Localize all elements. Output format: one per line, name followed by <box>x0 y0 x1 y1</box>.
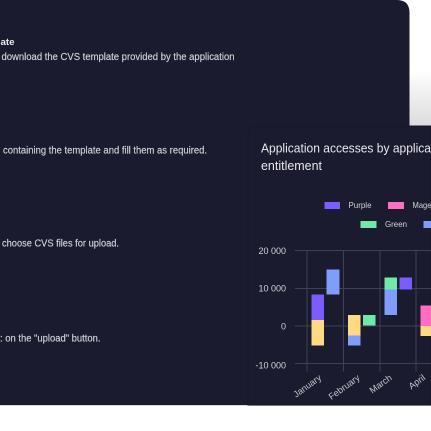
x axis labels: February <box>327 372 362 402</box>
step 3 text: choose CVS files for upload. <box>2 238 119 250</box>
panel: chart card <box>248 126 431 405</box>
bar chart <box>255 246 431 402</box>
chart title <box>261 142 431 173</box>
y axis labels: -10 000 <box>255 360 286 370</box>
legend <box>324 200 431 229</box>
y axis labels: 0 <box>281 322 286 332</box>
y axis labels <box>255 246 286 370</box>
x axis labels: March <box>368 373 394 395</box>
x axis labels: April <box>407 373 427 391</box>
April bars <box>420 306 431 336</box>
step 2 text: containing the template and fill them as required. <box>3 146 207 156</box>
legend: Green <box>385 219 407 229</box>
chart title: entitlement <box>261 159 323 173</box>
x axis labels: January <box>291 372 324 399</box>
step 4 text: : on the "upload" button. <box>0 334 100 344</box>
March bars <box>384 278 412 315</box>
February bars <box>348 315 376 346</box>
step 1 text: download the CVS template provided by the application <box>2 52 234 63</box>
y axis labels: 20 000 <box>258 246 286 256</box>
January bars <box>312 270 340 346</box>
step 1 heading: ate <box>0 37 14 48</box>
x axis labels <box>291 372 427 402</box>
legend: Purple <box>348 200 372 210</box>
grid lines <box>295 250 431 372</box>
y axis labels: 10 000 <box>258 284 286 294</box>
